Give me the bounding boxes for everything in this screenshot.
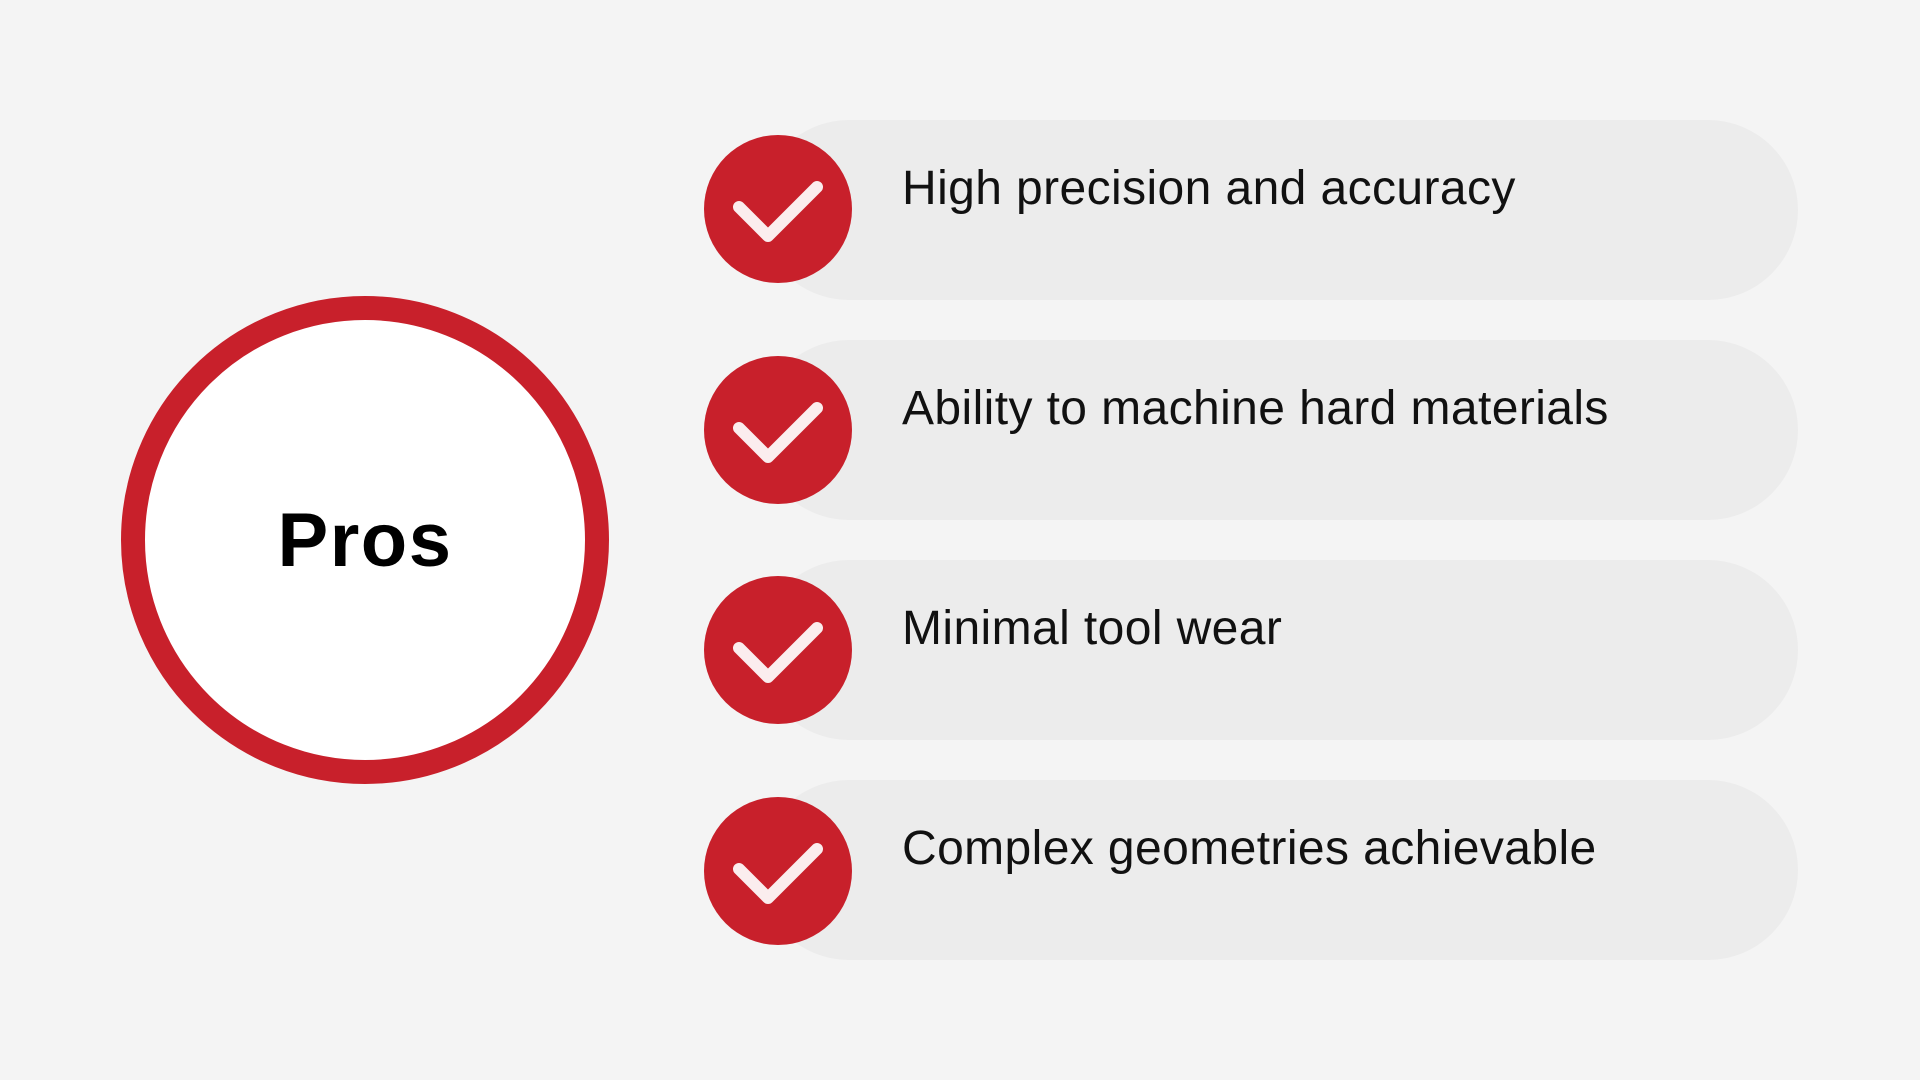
item 3 — [704, 576, 1282, 724]
item 1 — [704, 135, 1516, 283]
panel: pros circle — [121, 296, 609, 784]
icon: check — [704, 135, 852, 283]
icon: check — [704, 797, 852, 945]
text: Complex geometries achievable — [902, 822, 1597, 875]
text: Minimal tool wear — [902, 602, 1282, 655]
item 4 — [704, 797, 1597, 945]
icon: check — [704, 576, 852, 724]
heading: Pros: Pros — [278, 498, 452, 582]
icon: check — [704, 356, 852, 504]
text: Ability to machine hard materials — [902, 382, 1609, 435]
item 2 — [704, 356, 1609, 504]
text: High precision and accuracy — [902, 162, 1516, 215]
